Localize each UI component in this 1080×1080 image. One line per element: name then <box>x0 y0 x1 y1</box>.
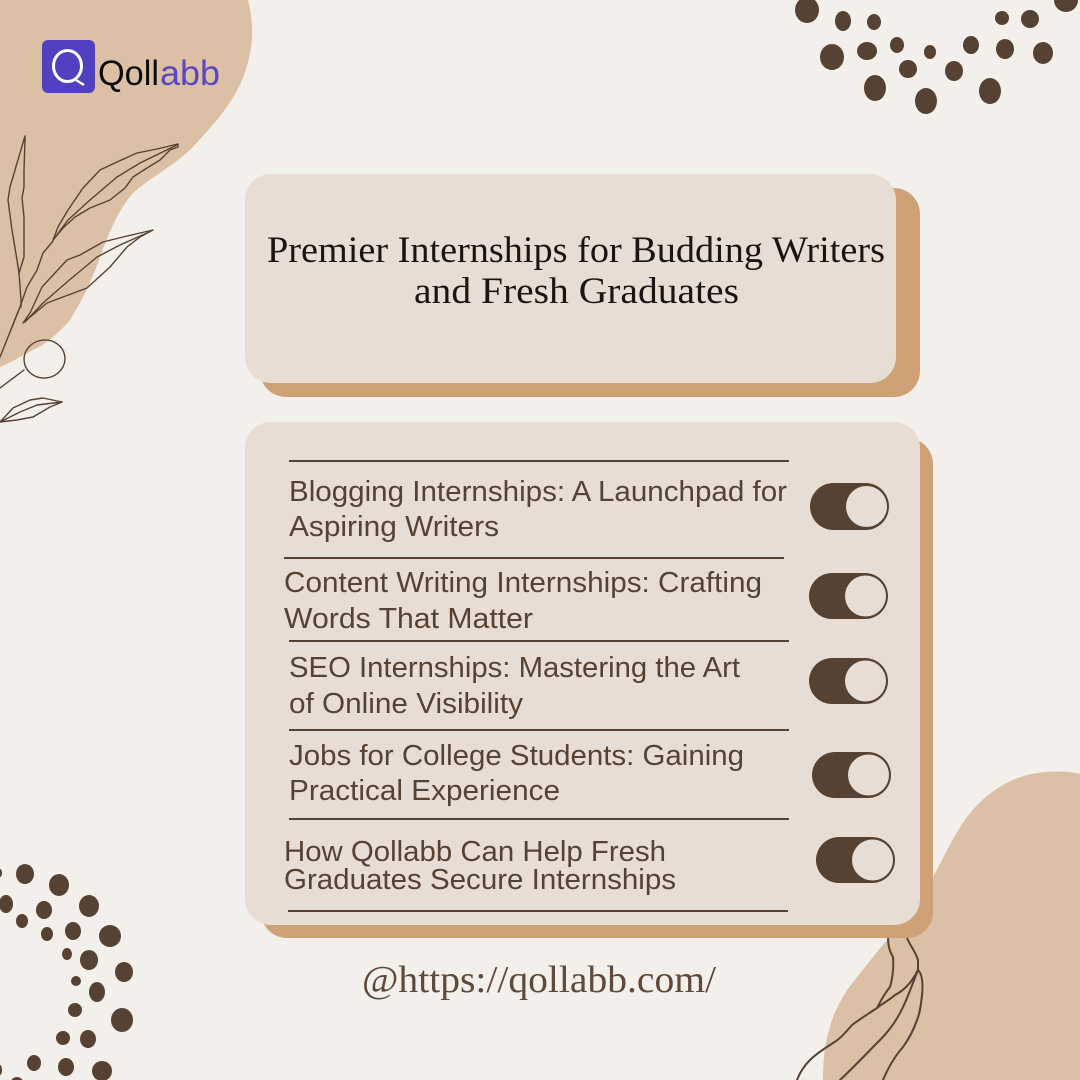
logo <box>42 40 220 93</box>
logo: abb <box>160 54 220 93</box>
list item 2 text <box>284 567 762 635</box>
list item 1 text: Aspiring Writers <box>289 511 499 543</box>
list item 4 text <box>289 740 744 807</box>
list item 2 text: Content Writing Internships: Crafting <box>284 567 762 599</box>
toggle 2 <box>809 573 888 619</box>
list item 5 text <box>284 836 676 896</box>
title: and Fresh Graduates <box>414 271 739 312</box>
blob: top left <box>0 0 252 367</box>
list item 5 text: Graduates Secure Internships <box>284 864 676 896</box>
botanical line art: top left <box>0 136 178 422</box>
logo: Qoll <box>98 54 159 93</box>
toggle 4 <box>812 752 891 798</box>
blob: bottom right <box>823 772 1080 1080</box>
list item 3 text <box>289 652 740 720</box>
list item 3 text: of Online Visibility <box>289 688 523 720</box>
list item 1 text: Blogging Internships: A Launchpad for <box>289 476 787 508</box>
toggle 5 <box>816 837 895 883</box>
panel: internship list <box>245 422 933 938</box>
toggle 3 <box>809 658 888 704</box>
title <box>267 230 885 312</box>
list item 1 text <box>289 476 787 543</box>
botanical line art: bottom right <box>797 935 923 1080</box>
list item 3 text: SEO Internships: Mastering the Art <box>289 652 740 684</box>
website url: @https://qollabb.com/ <box>362 959 716 1001</box>
list item 4 text: Jobs for College Students: Gaining <box>289 740 744 772</box>
list item 4 text: Practical Experience <box>289 775 560 807</box>
toggle 1 <box>810 483 889 530</box>
dots: bottom left <box>0 864 133 1080</box>
list item 2 text: Words That Matter <box>284 603 533 635</box>
dots: top right <box>795 0 1078 114</box>
list item 5 text: How Qollabb Can Help Fresh <box>284 836 666 868</box>
panel: title card <box>245 174 920 397</box>
title: Premier Internships for Budding Writers <box>267 230 885 271</box>
